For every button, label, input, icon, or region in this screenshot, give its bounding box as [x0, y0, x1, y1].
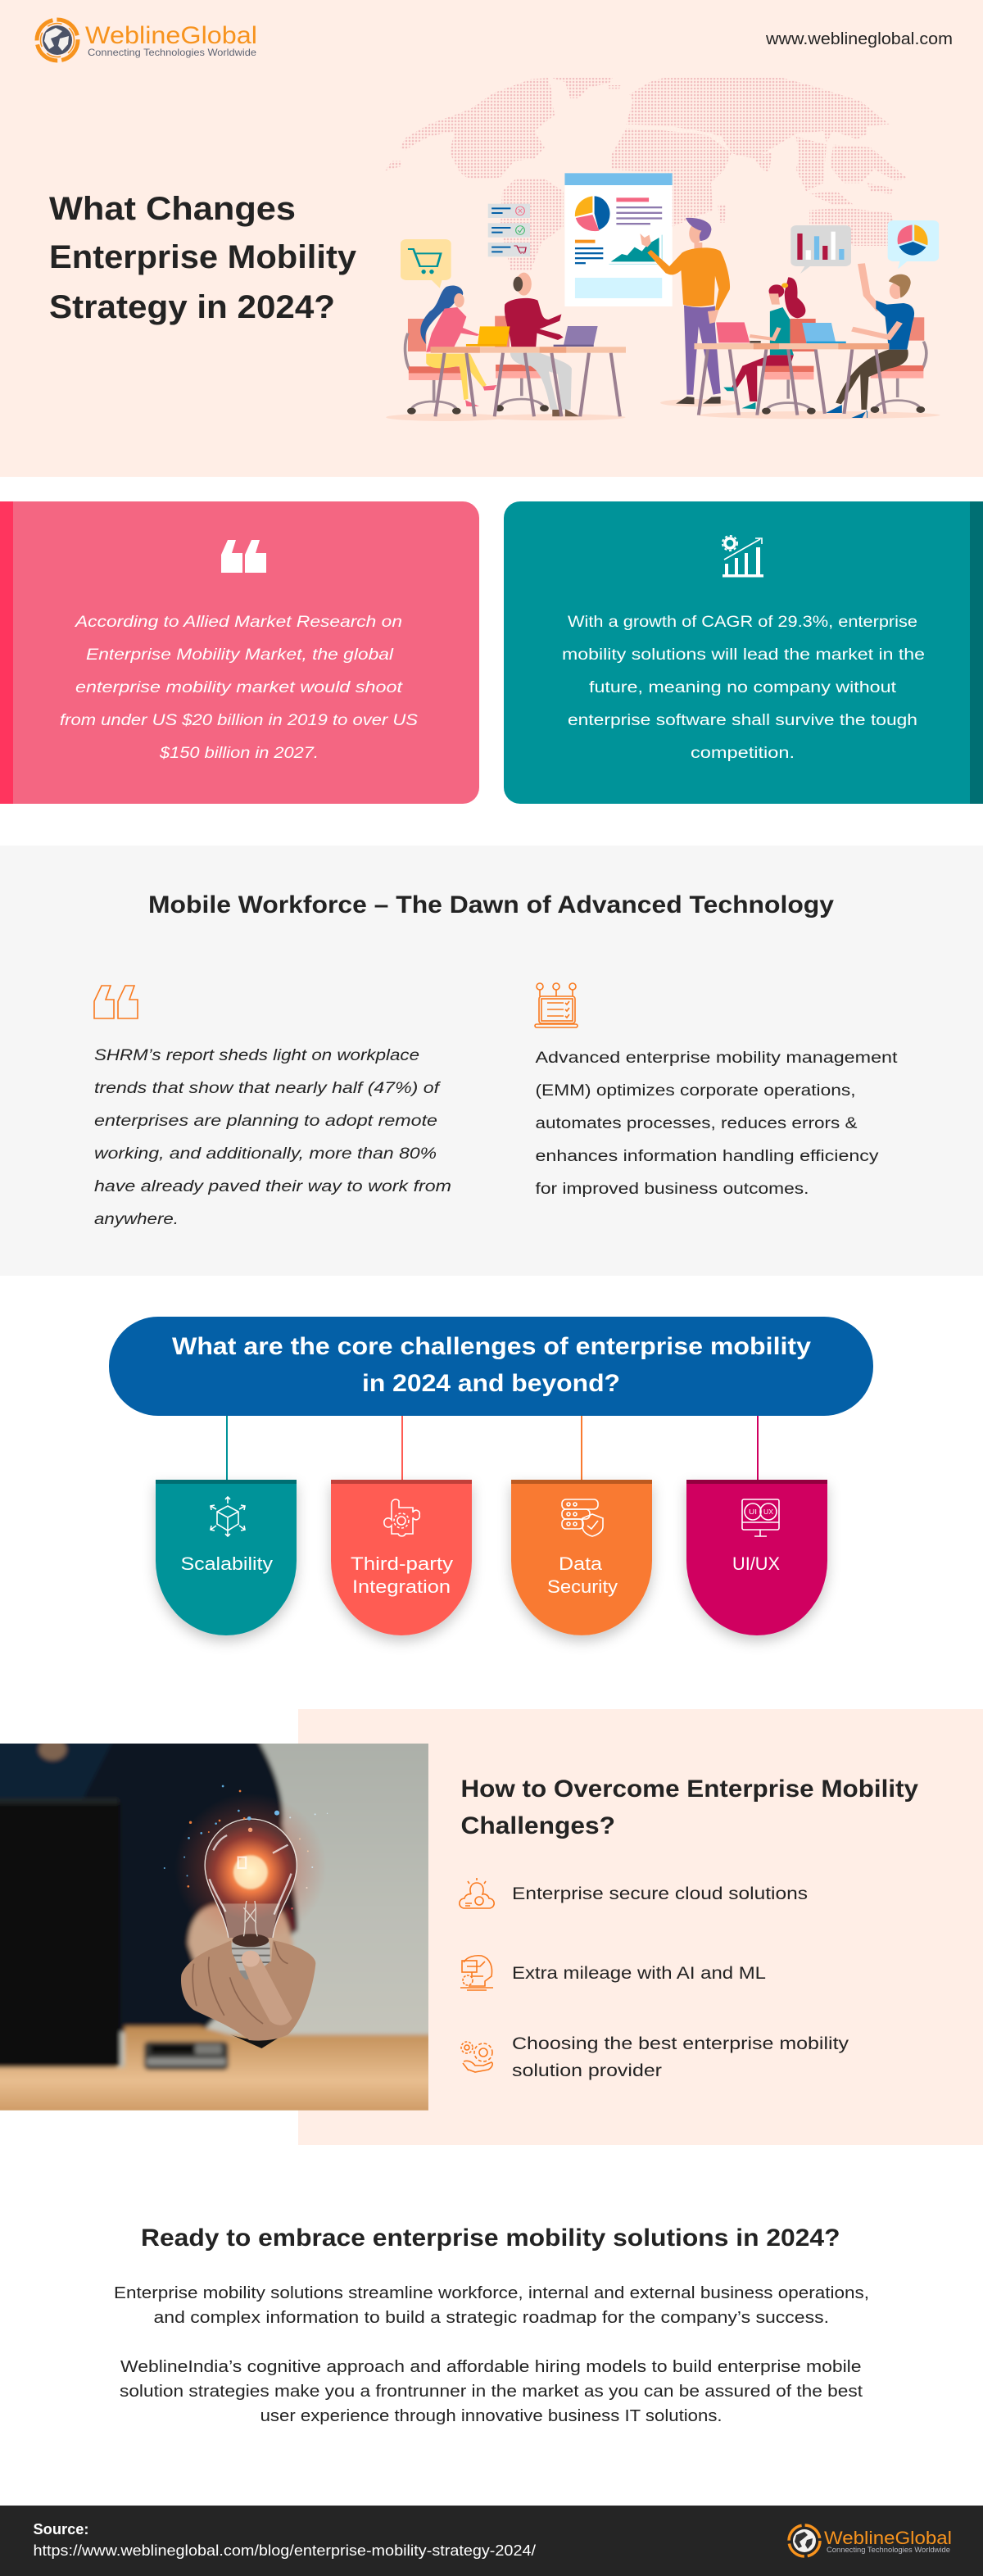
- quote text: Enterprise Mobility Market, the global: [86, 646, 394, 664]
- SHRM report text: working, and additionally, more than 80%: [94, 1145, 437, 1163]
- SHRM report text: SHRM’s report sheds light on workplace: [94, 1047, 419, 1064]
- challenges heading pill: [109, 1317, 873, 1416]
- paragraph one: Enterprise mobility solutions streamline workforce, internal and external business operations,: [114, 2284, 869, 2302]
- illustration: team meeting around a presentation board: [386, 173, 940, 421]
- EMM text: [536, 1050, 898, 1198]
- icon: monitor with UI and UX: UX: [763, 1508, 774, 1516]
- heading: [460, 1776, 918, 1839]
- chairs: [405, 316, 926, 415]
- hero panel: [0, 0, 983, 477]
- item: solution provider: [461, 2034, 849, 2080]
- source: https://www.weblineglobal.com/blog/enterprise-mobility-strategy-2024/: [33, 2542, 536, 2559]
- source: Source:: [33, 2521, 88, 2537]
- panel: overcoming challenges: [0, 1709, 983, 2145]
- panel: ready to embrace: [114, 2225, 869, 2425]
- quote text: [60, 614, 418, 762]
- woman with ponytail: [723, 277, 805, 409]
- CAGR text: mobility solutions will lead the market in the: [562, 646, 925, 664]
- photo: hand holding glowing light bulb: [0, 1735, 443, 2125]
- bald man in red sweater: [505, 273, 580, 416]
- CAGR text: enterprise software shall survive the tough: [568, 712, 917, 729]
- EMM text: for improved business outcomes.: [536, 1181, 809, 1198]
- challenges heading pill: What are the core challenges of enterprise mobility: [172, 1333, 811, 1360]
- logo: WeblineGlobal: Connecting Technologies Worldwide: [88, 47, 256, 58]
- tab: third-party integration: [331, 1480, 472, 1635]
- heading: Challenges?: [460, 1812, 615, 1839]
- EMM text: automates processes, reduces errors &: [536, 1115, 858, 1132]
- SHRM report text: enterprises are planning to adopt remote: [94, 1113, 437, 1130]
- label: UI/UX: [732, 1553, 780, 1574]
- card: CAGR growth: [504, 501, 983, 804]
- man with raised hand: [826, 264, 914, 418]
- meeting tables: [431, 343, 889, 416]
- CAGR text: future, meaning no company without: [589, 679, 897, 696]
- item text: [512, 2034, 849, 2080]
- icon: outlined quotation mark: [94, 986, 138, 1018]
- quote text: from under US $20 billion in 2019 to over US: [60, 712, 418, 729]
- hero title: [49, 191, 357, 325]
- SHRM report text: have already paved their way to work from: [94, 1178, 451, 1195]
- hero title: Strategy in 2024?: [49, 289, 335, 325]
- heading: Mobile Workforce – The Dawn of Advanced Technology: [148, 891, 834, 918]
- paragraph two: WeblineIndia’s cognitive approach and affordable hiring models to build enterprise mobile: [120, 2358, 862, 2376]
- presentation board: [564, 173, 673, 306]
- logo: WeblineGlobal: WeblineGlobal: [85, 22, 257, 49]
- quote text: enterprise mobility market would shoot: [75, 679, 403, 696]
- CAGR text: [562, 614, 925, 762]
- icon: AI head with gear: [460, 1956, 493, 1990]
- icon: gears above hand: [461, 2042, 492, 2072]
- challenges heading pill: in 2024 and beyond?: [362, 1370, 620, 1397]
- icon: white quotation mark: [221, 540, 266, 573]
- icon: checklist laptop: [535, 983, 578, 1027]
- footer logo: [789, 2525, 952, 2556]
- quote text: $150 billion in 2027.: [159, 745, 319, 762]
- SHRM report text: trends that show that nearly half (47%) of: [94, 1080, 441, 1097]
- SHRM report text: [94, 1047, 451, 1228]
- heading: Ready to embrace enterprise mobility solutions in 2024?: [141, 2225, 840, 2252]
- item text: Enterprise secure cloud solutions: [512, 1884, 808, 1903]
- icon: monitor with UI and UX: UI: [749, 1508, 757, 1516]
- icon: cube with arrows: [211, 1497, 245, 1536]
- laptops: [466, 322, 846, 347]
- source: [33, 2521, 536, 2559]
- paragraph two: user experience through innovative business IT solutions.: [260, 2407, 723, 2425]
- tab: UI/UX: [686, 1480, 827, 1635]
- tab: third-party integration: Integration: [352, 1576, 451, 1597]
- heading: How to Overcome Enterprise Mobility: [460, 1776, 918, 1803]
- item: secure cloud: [460, 1878, 808, 1908]
- icon: server and shield: [562, 1499, 603, 1536]
- tab: data security: [511, 1480, 652, 1635]
- icon: growth chart with gear: [723, 536, 763, 577]
- paragraph two: solution strategies make you a frontrunner in the market as you can be assured of the best: [120, 2383, 863, 2401]
- CAGR text: With a growth of CAGR of 29.3%, enterprise: [568, 614, 917, 631]
- EMM text: Advanced enterprise mobility management: [536, 1050, 898, 1067]
- footer logo: WeblineGlobal: [824, 2528, 952, 2548]
- website url: www.weblineglobal.com: [765, 30, 953, 48]
- panel: mobile workforce: [0, 846, 983, 1276]
- label: Third-party: [351, 1553, 453, 1574]
- hero title: Enterprise Mobility: [49, 239, 357, 275]
- paragraph one: [114, 2284, 869, 2327]
- icon: monitor with UI and UX: [742, 1499, 779, 1536]
- dotted world map: [385, 78, 915, 270]
- checklist mini cards: [488, 204, 530, 256]
- EMM text: (EMM) optimizes corporate operations,: [536, 1082, 855, 1100]
- speech bubble: shopping cart: [401, 239, 451, 288]
- label: Data: [559, 1553, 603, 1574]
- item text: solution provider: [512, 2061, 662, 2080]
- EMM text: enhances information handling efficiency: [536, 1148, 879, 1165]
- connector lines: [226, 1416, 759, 1480]
- label: Scalability: [180, 1553, 273, 1574]
- tab: data security: Security: [547, 1576, 618, 1597]
- woman with blue hair: [420, 285, 496, 406]
- icon: puzzle and gear: [384, 1499, 419, 1536]
- paragraph two: [120, 2358, 863, 2425]
- paragraph one: and complex information to build a strategic roadmap for the company’s success.: [154, 2309, 829, 2327]
- CAGR text: competition.: [691, 745, 795, 762]
- quote text: According to Allied Market Research on: [75, 614, 402, 631]
- speech bubble: pie chart: [888, 220, 939, 269]
- logo: WeblineGlobal: [37, 20, 257, 61]
- panel: core challenges: [109, 1317, 873, 1635]
- footer: [0, 2506, 983, 2576]
- speech bubble: bar chart: [790, 225, 851, 274]
- item: AI and ML: [460, 1956, 766, 1990]
- SHRM report text: anywhere.: [94, 1211, 179, 1228]
- icon: cloud and bulb: [460, 1878, 494, 1908]
- item text: Extra mileage with AI and ML: [512, 1964, 766, 1983]
- item text: Choosing the best enterprise mobility: [512, 2034, 849, 2053]
- tab: scalability: [156, 1480, 297, 1635]
- presenter in orange sweater: [640, 218, 730, 404]
- hero title: What Changes: [49, 191, 296, 227]
- card: market research quote: [0, 501, 479, 804]
- footer logo: Connecting Technologies Worldwide: [827, 2546, 950, 2555]
